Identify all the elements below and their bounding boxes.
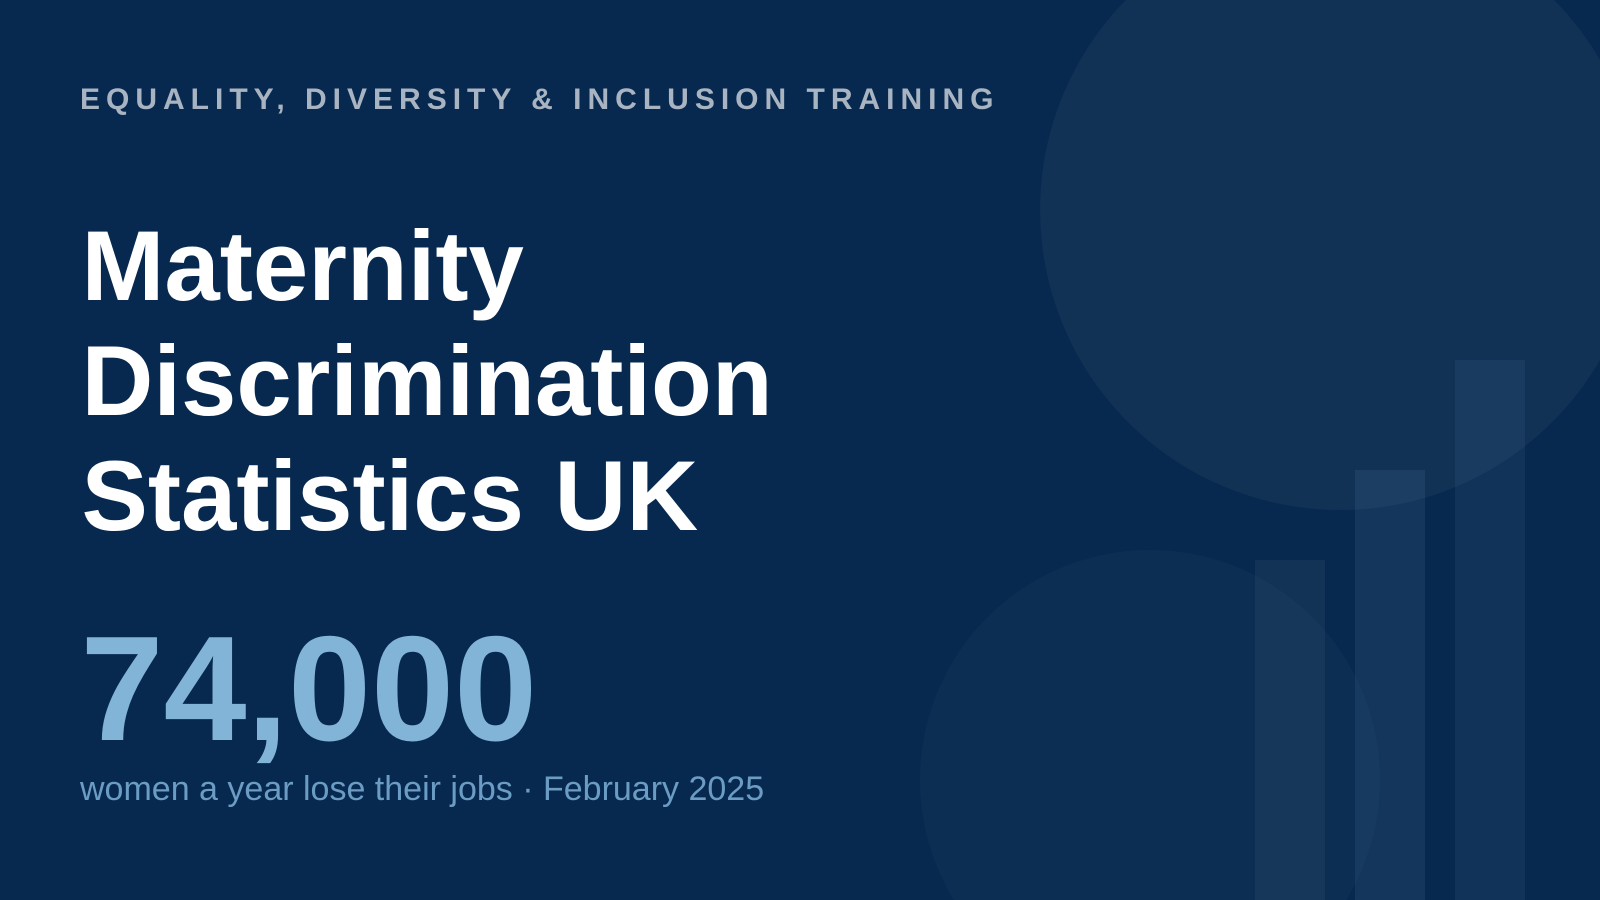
title: Maternity (82, 211, 524, 322)
statistic caption: women a year lose their jobs · February 2025 (79, 770, 764, 808)
eyebrow heading: EQUALITY, DIVERSITY & INCLUSION TRAINING (80, 83, 1000, 116)
decorative background circle: top right (1040, 0, 1600, 510)
title: Statistics UK (82, 441, 698, 552)
title (82, 211, 773, 552)
key statistic: 74,000 (80, 605, 537, 772)
decorative background circle: bottom (920, 550, 1380, 900)
title: Discrimination (82, 326, 773, 437)
decorative bar chart (1255, 360, 1525, 900)
